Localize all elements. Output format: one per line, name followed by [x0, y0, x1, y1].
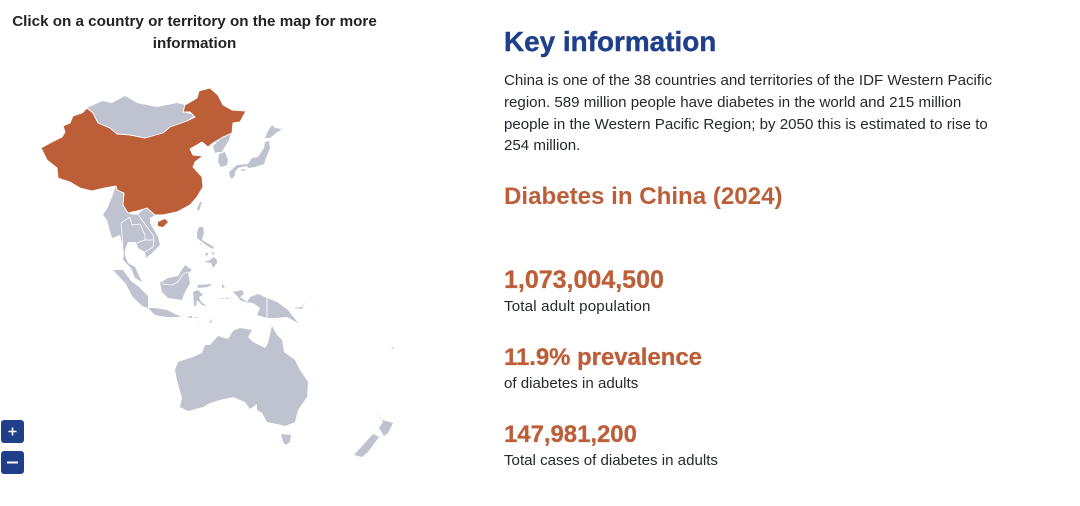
stat: total adult population: Total adult population: [504, 298, 651, 315]
heading: diabetes in China: Diabetes in China (2024): [504, 183, 783, 210]
stat: total cases: 147,981,200: [504, 421, 637, 448]
country: China: [41, 88, 246, 227]
stat: total cases: Total cases of diabetes in adults: [504, 452, 718, 469]
zoom out button: [1, 451, 24, 474]
Borneo: [160, 265, 192, 300]
map heading: Click on a country or territory on the map for more information: [12, 13, 377, 52]
Sulawesi: [193, 284, 225, 307]
stat: prevalence: 11.9% prevalence: [504, 344, 702, 371]
stat: prevalence: [504, 344, 702, 392]
region: Southeast Asia and Oceania: [103, 125, 394, 457]
Tasmania: [281, 434, 291, 445]
Java: [148, 308, 181, 317]
Southeast Asia borders: [121, 213, 154, 253]
Taiwan: [197, 202, 202, 211]
icon: minus: [7, 462, 18, 464]
Borneo border: [162, 272, 188, 285]
key information paragraph: 254 million.: [504, 137, 580, 154]
New Guinea: [233, 290, 298, 323]
key information paragraph: [504, 72, 992, 154]
Sumatra: [113, 270, 148, 308]
country: Mongolia: [87, 96, 195, 138]
stat: total adult population: 1,073,004,500: [504, 266, 664, 294]
stat: total adult population: [504, 266, 664, 315]
stat: prevalence: of diabetes in adults: [504, 375, 638, 392]
icon: plus: [8, 428, 16, 436]
Philippines: [197, 227, 217, 268]
stat: total cases: [504, 421, 718, 469]
small islands: [186, 298, 318, 324]
key information paragraph: people in the Western Pacific Region; by 2050 this is estimated to rise to: [504, 116, 988, 133]
key information paragraph: region. 589 million people have diabetes in the world and 215 million: [504, 94, 961, 111]
map of the Western Pacific: [42, 88, 394, 457]
heading: key information: Key information: [504, 26, 716, 57]
Australia: [175, 326, 308, 426]
mainland Southeast Asia: [103, 186, 160, 282]
New Guinea border: [266, 297, 268, 318]
zoom in button: [1, 420, 24, 443]
key information paragraph: China is one of the 38 countries and territories of the IDF Western Pacific: [504, 72, 992, 89]
Japan: [229, 125, 282, 179]
New Zealand: [354, 347, 394, 457]
Korea: [213, 134, 231, 167]
